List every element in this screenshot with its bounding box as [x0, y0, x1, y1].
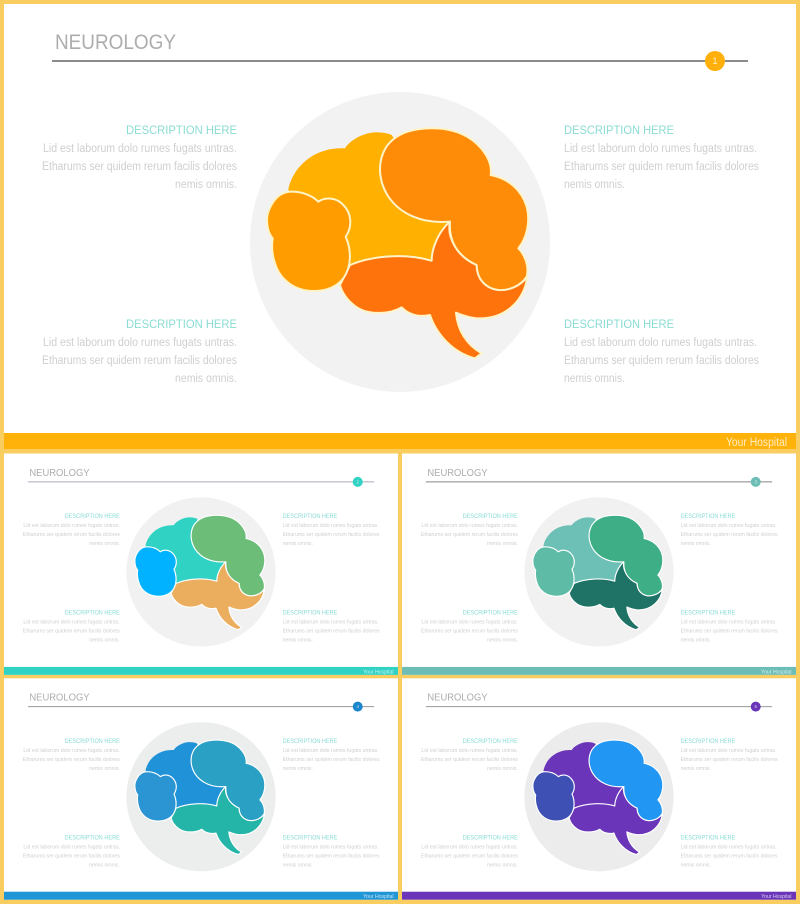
title: NEUROLOGY	[427, 693, 488, 704]
text block: bottom left: Lid est laborum dolo rumes fugats untras.	[43, 337, 237, 349]
text block: bottom right	[283, 611, 380, 644]
text block: top right: DESCRIPTION HERE	[681, 739, 735, 745]
text block: bottom right: nemis omnis.	[283, 638, 313, 644]
slide number marker	[751, 702, 761, 712]
text block: top right: Lid est laborum dolo rumes fugats untras.	[283, 748, 379, 754]
text block: top left: Lid est laborum dolo rumes fugats untras.	[43, 143, 237, 155]
slide number marker: 1	[712, 56, 718, 66]
text block: top left	[421, 739, 518, 772]
text block: bottom right	[283, 835, 380, 868]
text block: top right: nemis omnis.	[283, 766, 313, 772]
text block: top right: DESCRIPTION HERE	[283, 739, 337, 745]
text block: top left: nemis omnis.	[89, 541, 120, 547]
header line	[426, 481, 772, 483]
title: NEUROLOGY	[29, 693, 90, 704]
text block: top left: Lid est laborum dolo rumes fugats untras.	[23, 523, 120, 529]
text block: bottom left: DESCRIPTION HERE	[463, 835, 518, 841]
text block: bottom right: Lid est laborum dolo rumes fugats untras.	[283, 844, 379, 850]
slide number marker: 5	[754, 704, 757, 709]
slide number marker	[353, 702, 363, 712]
text block: bottom right: DESCRIPTION HERE	[283, 835, 337, 841]
text block: top right: Lid est laborum dolo rumes fugats untras.	[681, 523, 777, 529]
text block: top left: Etharums ser quidem rerum facilis dolores	[421, 757, 518, 763]
slide number marker: 2	[356, 479, 359, 484]
text block: top left: Etharums ser quidem rerum facilis dolores	[23, 532, 120, 538]
footer bar: Your Hospital	[761, 669, 792, 675]
slide number marker	[353, 477, 363, 487]
text block: top right: Lid est laborum dolo rumes fugats untras.	[283, 523, 379, 529]
text block: top right: DESCRIPTION HERE	[564, 123, 674, 137]
slide number marker	[705, 51, 725, 71]
footer bar: Your Hospital	[363, 669, 394, 675]
text block: top right: nemis omnis.	[283, 541, 313, 547]
text block: bottom left: nemis omnis.	[487, 638, 518, 644]
title: NEUROLOGY	[427, 468, 488, 479]
text block: bottom right: nemis omnis.	[681, 638, 711, 644]
text block: bottom left: Lid est laborum dolo rumes fugats untras.	[23, 844, 120, 850]
panel: green slide	[402, 453, 796, 675]
text block: bottom left: DESCRIPTION HERE	[126, 317, 237, 331]
text block: top left: Etharums ser quidem rerum facilis dolores	[421, 532, 518, 538]
text block: bottom right: DESCRIPTION HERE	[681, 835, 735, 841]
text block: bottom left	[42, 317, 237, 385]
text block: top left: DESCRIPTION HERE	[463, 739, 518, 745]
text block: top right: Etharums ser quidem rerum facilis dolores	[681, 757, 778, 763]
text block: top left: nemis omnis.	[175, 179, 237, 191]
icon: brain in grey circle	[250, 92, 550, 392]
text block: top right	[283, 739, 380, 772]
slide number marker: 3	[754, 479, 757, 484]
text block: bottom right: Lid est laborum dolo rumes fugats untras.	[283, 620, 379, 626]
text block: bottom left: nemis omnis.	[487, 862, 518, 868]
text block: bottom right: nemis omnis.	[681, 862, 711, 868]
text block: top left: DESCRIPTION HERE	[65, 739, 120, 745]
text block: bottom left: nemis omnis.	[89, 638, 120, 644]
text block: bottom right: Lid est laborum dolo rumes fugats untras.	[564, 337, 757, 349]
text block: top left: Lid est laborum dolo rumes fugats untras.	[421, 523, 518, 529]
text block: bottom right: Etharums ser quidem rerum facilis dolores	[283, 629, 380, 635]
text block: bottom left: Lid est laborum dolo rumes fugats untras.	[23, 620, 120, 626]
text block: bottom left	[421, 835, 518, 868]
text block: bottom left: DESCRIPTION HERE	[65, 611, 120, 617]
text block: top left: nemis omnis.	[89, 766, 120, 772]
text block: top left: Lid est laborum dolo rumes fugats untras.	[421, 748, 518, 754]
icon: brain in grey circle	[126, 497, 276, 647]
panel: purple slide	[402, 678, 796, 900]
panel: orange slide	[4, 4, 796, 449]
text block: top left: nemis omnis.	[487, 541, 518, 547]
footer bar	[402, 667, 796, 675]
panel: blue slide	[4, 678, 398, 900]
text block: bottom left: Etharums ser quidem rerum facilis dolores	[23, 629, 120, 635]
header line	[52, 60, 748, 62]
text block: top left: Lid est laborum dolo rumes fugats untras.	[23, 748, 120, 754]
text block: bottom left: Etharums ser quidem rerum facilis dolores	[421, 629, 518, 635]
text block: top right: nemis omnis.	[681, 766, 711, 772]
header line	[28, 481, 374, 483]
text block: top left: DESCRIPTION HERE	[65, 514, 120, 520]
text block: top right: nemis omnis.	[564, 179, 625, 191]
icon: brain in grey circle	[126, 722, 276, 871]
text block: top left: Etharums ser quidem rerum facilis dolores	[42, 161, 237, 173]
slide number marker	[751, 477, 761, 487]
text block: bottom left	[421, 611, 518, 644]
text block: top left	[42, 123, 237, 191]
text block: top right: Etharums ser quidem rerum facilis dolores	[283, 532, 380, 538]
slide number marker: 4	[356, 704, 359, 709]
header line	[28, 706, 374, 708]
text block: bottom right: Etharums ser quidem rerum facilis dolores	[283, 853, 380, 859]
text block: bottom left: DESCRIPTION HERE	[65, 835, 120, 841]
text block: bottom right	[681, 835, 778, 868]
text block: top left: DESCRIPTION HERE	[463, 514, 518, 520]
text block: top right: Etharums ser quidem rerum facilis dolores	[681, 532, 778, 538]
footer bar	[4, 433, 796, 449]
text block: bottom left	[23, 835, 120, 868]
text block: bottom right: nemis omnis.	[564, 373, 625, 385]
text block: top left	[421, 514, 518, 547]
text block: bottom right: DESCRIPTION HERE	[283, 611, 337, 617]
header line	[426, 706, 772, 708]
footer bar: Your Hospital	[726, 437, 787, 449]
text block: bottom left: DESCRIPTION HERE	[463, 611, 518, 617]
text block: bottom right: DESCRIPTION HERE	[564, 317, 674, 331]
text block: bottom right	[681, 611, 778, 644]
text block: top left	[23, 739, 120, 772]
footer bar	[4, 892, 398, 900]
text block: top right: DESCRIPTION HERE	[283, 514, 337, 520]
text block: top left: DESCRIPTION HERE	[126, 123, 237, 137]
text block: bottom left: Lid est laborum dolo rumes fugats untras.	[421, 844, 518, 850]
text block: top right	[681, 514, 778, 547]
text block: bottom right: Etharums ser quidem rerum facilis dolores	[681, 853, 778, 859]
text block: top right: Etharums ser quidem rerum facilis dolores	[283, 757, 380, 763]
text block: top right: nemis omnis.	[681, 541, 711, 547]
text block: top right	[564, 123, 759, 191]
text block: top left: Etharums ser quidem rerum facilis dolores	[23, 757, 120, 763]
text block: bottom right	[564, 317, 759, 385]
text block: bottom right: Lid est laborum dolo rumes fugats untras.	[681, 620, 777, 626]
text block: bottom left: Etharums ser quidem rerum facilis dolores	[42, 355, 237, 367]
text block: bottom right: nemis omnis.	[283, 862, 313, 868]
footer bar	[4, 667, 398, 675]
text block: top right: Lid est laborum dolo rumes fugats untras.	[564, 143, 757, 155]
footer bar: Your Hospital	[363, 894, 394, 900]
icon: brain in grey circle	[524, 722, 674, 871]
text block: bottom right: Etharums ser quidem rerum facilis dolores	[681, 629, 778, 635]
text block: top right	[681, 739, 778, 772]
text block: bottom left: nemis omnis.	[89, 862, 120, 868]
icon: brain in grey circle	[524, 497, 674, 647]
text block: bottom left: Lid est laborum dolo rumes fugats untras.	[421, 620, 518, 626]
text block: top right: DESCRIPTION HERE	[681, 514, 735, 520]
footer bar: Your Hospital	[761, 894, 792, 900]
text block: bottom right: Lid est laborum dolo rumes fugats untras.	[681, 844, 777, 850]
text block: bottom right: Etharums ser quidem rerum facilis dolores	[564, 355, 759, 367]
text block: bottom left: Etharums ser quidem rerum facilis dolores	[421, 853, 518, 859]
text block: top left: nemis omnis.	[487, 766, 518, 772]
text block: top right	[283, 514, 380, 547]
text block: bottom right: DESCRIPTION HERE	[681, 611, 735, 617]
text block: top right: Lid est laborum dolo rumes fugats untras.	[681, 748, 777, 754]
text block: top left	[23, 514, 120, 547]
text block: top right: Etharums ser quidem rerum facilis dolores	[564, 161, 759, 173]
title: NEUROLOGY	[55, 31, 176, 54]
footer bar	[402, 892, 796, 900]
text block: bottom left: Etharums ser quidem rerum facilis dolores	[23, 853, 120, 859]
title: NEUROLOGY	[29, 468, 90, 479]
panel: teal slide	[4, 453, 398, 675]
text block: bottom left	[23, 611, 120, 644]
text block: bottom left: nemis omnis.	[175, 373, 237, 385]
